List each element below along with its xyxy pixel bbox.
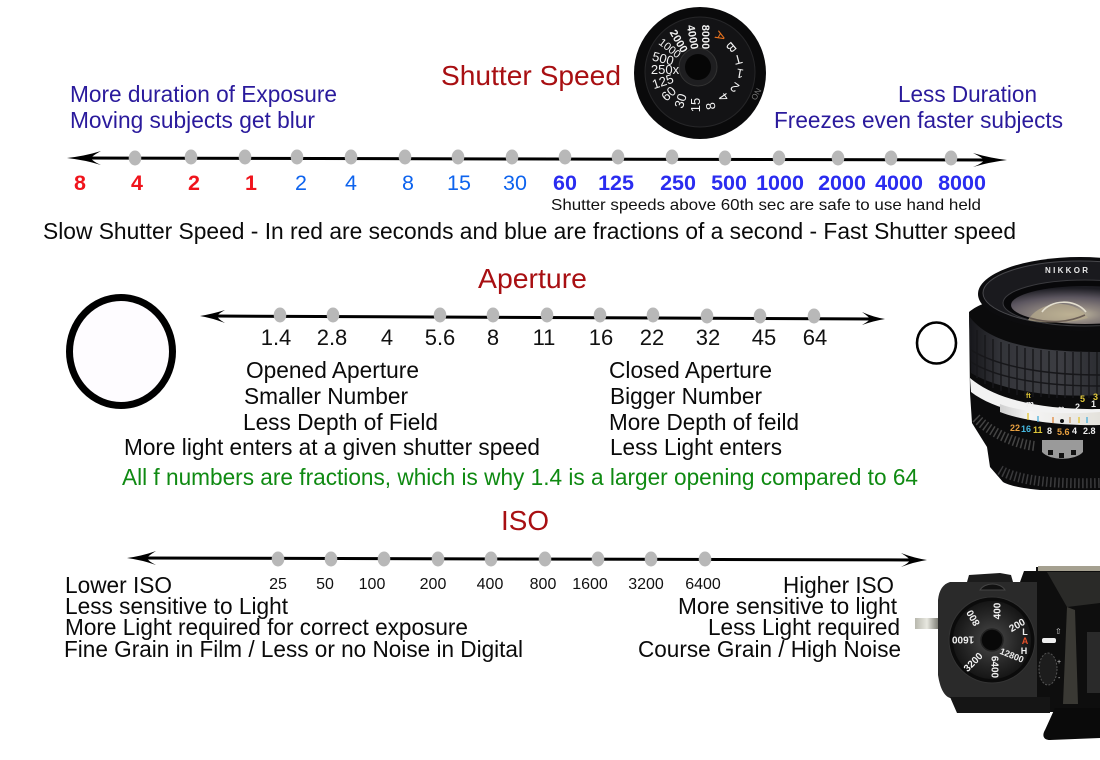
panel: shutter speed (43, 7, 1063, 244)
icon: shutter speed dial: 8000 (699, 25, 711, 49)
icon: nikkor lens: 16 (1021, 424, 1031, 434)
icon: camera iso dial: 12800 (998, 646, 1025, 665)
icon: camera iso dial: 1600 (951, 634, 974, 644)
labels: slow fractions of a second: 15 (447, 171, 471, 195)
text: higher iso notes: Less Light required (708, 614, 900, 640)
icon: camera iso dial: 400 (992, 602, 1004, 619)
labels: iso values: 25 (269, 576, 287, 593)
text: fast side notes: Less Duration (898, 81, 1037, 107)
icon: nikkor lens: 4 (1072, 426, 1077, 436)
icon: shutter speed dial (634, 7, 766, 139)
icon: shutter speed dial: 2 (727, 79, 742, 96)
labels: iso values (269, 576, 721, 593)
text: slow side notes: Moving subjects get blur (70, 107, 315, 133)
icon: shutter speed dial: B (723, 39, 739, 56)
icon: shutter speed dial: ON (750, 87, 763, 102)
text: opened aperture notes: More light enters at a given shutter speed (124, 434, 540, 460)
labels: slow fractions of a second (295, 171, 527, 195)
icon: camera iso dial: 6400 (988, 656, 1000, 679)
icon: shutter speed dial: 4000 (684, 24, 700, 50)
icon: shutter speed dial: 1 (735, 65, 745, 82)
labels: fast fractions of a second: 4000 (875, 171, 923, 195)
icon: camera iso dial: 800 (965, 607, 983, 627)
icon: camera iso dial: ⇧ (1055, 627, 1062, 636)
labels: f numbers: 64 (803, 325, 827, 350)
labels: iso values: 800 (530, 576, 556, 593)
arrow: aperture scale (200, 308, 885, 325)
icon: shutter speed dial: 250x (651, 62, 680, 77)
labels: iso values: 1600 (572, 576, 608, 593)
labels: f numbers: 4 (381, 325, 393, 350)
panel: iso (64, 505, 1100, 740)
heading: iso: ISO (501, 505, 549, 536)
icon: shutter speed dial: 500 (651, 49, 675, 68)
icon: shutter speed dial: 1000 (656, 37, 683, 61)
icon: nikkor lens: 2 (1075, 402, 1080, 412)
labels: f numbers (261, 325, 827, 350)
labels: fast fractions of a second: 500 (711, 171, 747, 195)
icon: camera iso dial: + (1057, 659, 1061, 666)
labels: fast fractions of a second: 60 (553, 171, 577, 195)
text: opened aperture notes: Smaller Number (244, 383, 408, 409)
labels: shutter speeds in seconds: 4 (131, 171, 143, 195)
labels: f numbers: 11 (533, 325, 555, 350)
labels: iso values: 3200 (628, 576, 664, 593)
caption: slow to fast shutter speed: Slow Shutter Speed - In red are seconds and blue are fractions of a second - Fast Shutter speed (43, 218, 1016, 244)
icon: camera iso dial: H (1021, 646, 1027, 656)
text: lower iso notes (64, 572, 523, 662)
labels: iso values: 50 (316, 576, 334, 593)
labels: slow fractions of a second: 4 (345, 171, 357, 195)
text: higher iso notes (638, 572, 901, 662)
icon: shutter speed dial: A (712, 29, 729, 44)
icon: shutter speed dial: 125 (650, 71, 675, 92)
icon: nikkor lens: NIKKOR (1045, 266, 1088, 275)
text: opened aperture notes: Opened Aperture (246, 357, 419, 383)
icon: closed aperture circle (917, 322, 956, 364)
text: lower iso notes: Fine Grain in Film / Less or no Noise in Digital (64, 636, 523, 662)
icon: nikkor lens: 22 (1010, 423, 1020, 433)
labels: fast fractions of a second: 2000 (818, 171, 866, 195)
icon: wide open aperture circle (70, 298, 172, 406)
note: f numbers are fractions: All f numbers are fractions, which is why 1.4 is a larger opening compared to 64 (122, 464, 918, 490)
labels: f numbers: 32 (696, 325, 720, 350)
icon: nikkor lens: m (1026, 399, 1034, 409)
icon: nikkor lens: 2.8 (1083, 426, 1096, 436)
icon: shutter speed dial: 15 (688, 98, 703, 112)
icon: nikkor lens: ft (1026, 393, 1031, 400)
labels: f numbers: 1.4 (261, 325, 291, 350)
icon: camera iso dial: L (1022, 627, 1028, 637)
arrow: shutter speed scale (67, 150, 1007, 167)
icon: camera iso dial (915, 566, 1100, 740)
text: closed aperture notes: Bigger Number (610, 383, 762, 409)
heading: shutter speed: Shutter Speed (441, 60, 621, 91)
labels: iso values: 400 (477, 576, 503, 593)
icon: shutter speed dial: 30 (671, 92, 690, 110)
icon: nikkor lens: 1 (1091, 399, 1096, 409)
icon: camera iso dial: A (1022, 636, 1029, 646)
text: closed aperture notes: Closed Aperture (609, 357, 772, 383)
icon: shutter speed dial: 2000 (667, 28, 689, 55)
labels: fast fractions of a second: 1000 (756, 171, 804, 195)
labels: f numbers: 45 (752, 325, 776, 350)
labels: slow fractions of a second: 30 (503, 171, 527, 195)
icon: shutter speed dial: 8 (702, 101, 719, 111)
text: higher iso notes: Course Grain / High Noise (638, 636, 901, 662)
labels: iso values: 100 (359, 576, 385, 593)
labels: fast fractions of a second: 250 (660, 171, 696, 195)
text: closed aperture notes: Less Light enters (610, 434, 782, 460)
text: fast side notes: Freezes even faster subjects (774, 107, 1063, 133)
text: higher iso notes: More sensitive to light (678, 593, 898, 619)
labels: f numbers: 2.8 (317, 325, 347, 350)
text: slow side notes: More duration of Exposure (70, 81, 337, 107)
icon: shutter speed dial: 4 (715, 90, 732, 105)
labels: shutter speeds in seconds: 2 (188, 171, 200, 195)
icon: nikkor lens: ∞ (1058, 403, 1065, 413)
labels: fast fractions of a second: 125 (598, 171, 634, 195)
icon: shutter speed dial: T (732, 51, 744, 68)
heading: aperture: Aperture (478, 263, 587, 294)
icon: camera iso dial: 200 (1008, 617, 1028, 635)
text: closed aperture notes (609, 357, 799, 460)
arrow: iso scale (127, 551, 927, 567)
labels: slow fractions of a second: 8 (402, 171, 414, 195)
labels: f numbers: 8 (487, 325, 499, 350)
text: fast side notes (774, 81, 1063, 133)
icon: shutter speed dial: 60 (658, 83, 679, 104)
text: lower iso notes: Lower ISO (65, 572, 172, 598)
labels: f numbers: 5.6 (425, 325, 455, 350)
text: opened aperture notes (124, 357, 540, 460)
icon: nikkor lens (969, 257, 1100, 490)
text: opened aperture notes: Less Depth of Field (243, 409, 438, 435)
labels: iso values: 6400 (685, 576, 721, 593)
text: slow side notes (70, 81, 337, 133)
labels: f numbers: 22 (640, 325, 664, 350)
icon: camera iso dial: - (1058, 675, 1061, 682)
labels: iso values: 200 (420, 576, 446, 593)
text: lower iso notes: Less sensitive to Light (65, 593, 289, 619)
labels: shutter speeds in seconds (74, 171, 257, 195)
labels: fast fractions of a second: 8000 (938, 171, 986, 195)
text: higher iso notes: Higher ISO (783, 572, 894, 598)
labels: shutter speeds in seconds: 8 (74, 171, 86, 195)
icon: nikkor lens: 8 (1047, 426, 1052, 436)
icon: nikkor lens: 5 (1080, 394, 1085, 404)
icon: nikkor lens: 5.6 (1057, 427, 1070, 437)
icon: nikkor lens: 3 (1093, 392, 1098, 402)
icon: nikkor lens: 11 (1033, 425, 1043, 435)
panel: aperture (70, 257, 1100, 490)
icon: camera iso dial: 3200 (962, 651, 986, 674)
labels: slow fractions of a second: 2 (295, 171, 307, 195)
labels: f numbers: 16 (589, 325, 613, 350)
text: lower iso notes: More Light required for correct exposure (65, 614, 468, 640)
text: closed aperture notes: More Depth of feild (609, 409, 799, 435)
labels: shutter speeds in seconds: 1 (245, 171, 257, 195)
labels: fast fractions of a second (553, 171, 986, 195)
note: hand held speeds: Shutter speeds above 60th sec are safe to use hand held (551, 197, 981, 214)
